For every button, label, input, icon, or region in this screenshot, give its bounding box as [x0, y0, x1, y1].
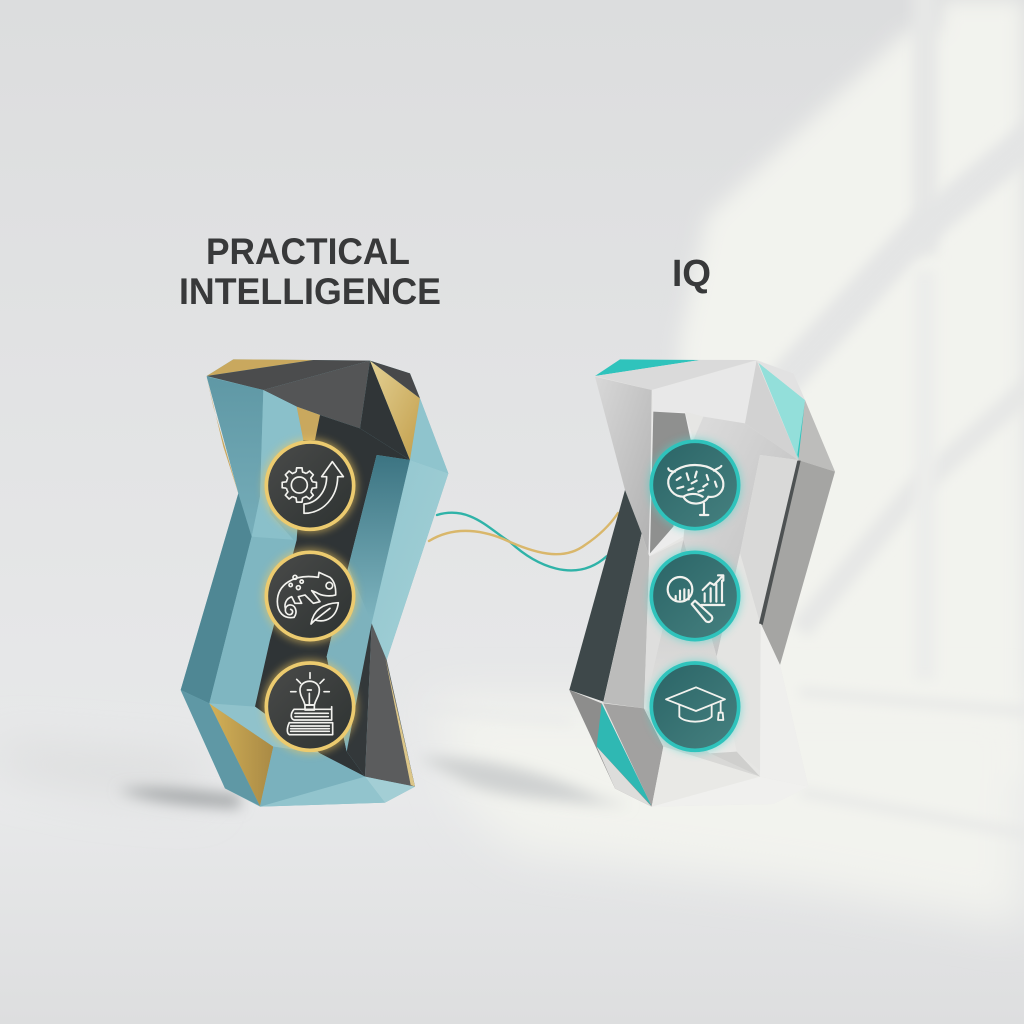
title: Practical Intelligence: [179, 231, 441, 312]
sculpture body facets: [569, 359, 835, 807]
right sculpture: IQ: [569, 359, 835, 807]
shadow under right sculpture: [418, 757, 630, 806]
shadow under left sculpture: [118, 788, 240, 808]
connecting wires: [429, 513, 618, 570]
badge: chameleon and leaf: [263, 549, 357, 643]
title: IQ: IQ: [672, 253, 711, 295]
badge: magnifier with chart: [648, 549, 742, 643]
sculpture body facets: [181, 359, 448, 807]
title: Practical Intelligence: PRACTICAL: [206, 231, 410, 272]
badge: brain: [648, 438, 742, 532]
title: Practical Intelligence: INTELLIGENCE: [179, 271, 441, 312]
badge: light bulb on books: [263, 659, 357, 754]
left sculpture: practical intelligence: [181, 359, 448, 807]
badge: gear and rising arrow: [263, 438, 357, 533]
badge: graduation cap: [648, 660, 742, 753]
